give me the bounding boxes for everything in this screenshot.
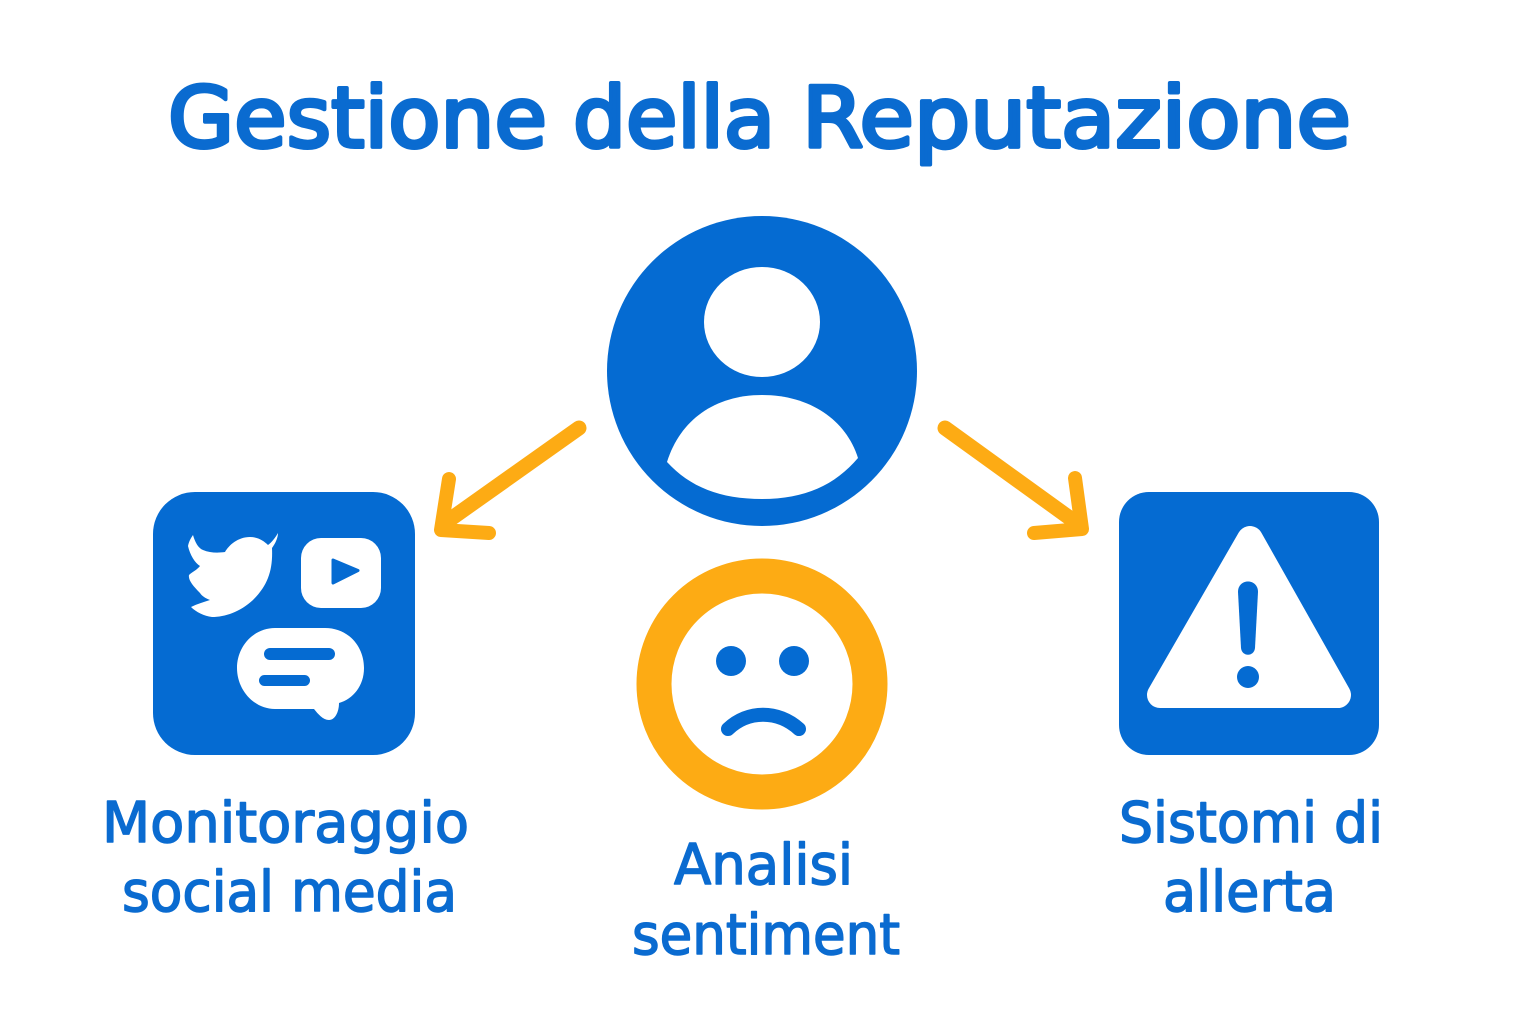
label: sentiment analysis: [632, 833, 900, 968]
label: alert systems: Sistomi di: [1119, 791, 1383, 856]
label: social media monitoring: Monitoraggio: [102, 791, 469, 856]
title: Reputazione: [802, 69, 1351, 167]
label: social media monitoring: [102, 791, 469, 925]
arrow: to alert systems: [945, 428, 1082, 533]
title: della: [573, 69, 775, 167]
label: social media monitoring: social media: [122, 860, 457, 925]
title: [168, 69, 1351, 167]
panel: social media icon: [153, 492, 415, 755]
icon: video play: [301, 538, 381, 608]
label: sentiment analysis: Analisi: [674, 833, 853, 898]
title: Gestione: [168, 69, 547, 167]
icon: central person: [607, 216, 917, 526]
label: alert systems: allerta: [1163, 860, 1336, 925]
icon: sad face: [654, 576, 870, 792]
arrow: to social media monitoring: [441, 428, 579, 533]
label: sentiment analysis: sentiment: [632, 903, 900, 968]
icon: bird: [188, 533, 278, 617]
icon: chat bubble: [237, 628, 364, 720]
panel: alert icon: [1119, 492, 1379, 755]
label: alert systems: [1119, 791, 1383, 925]
